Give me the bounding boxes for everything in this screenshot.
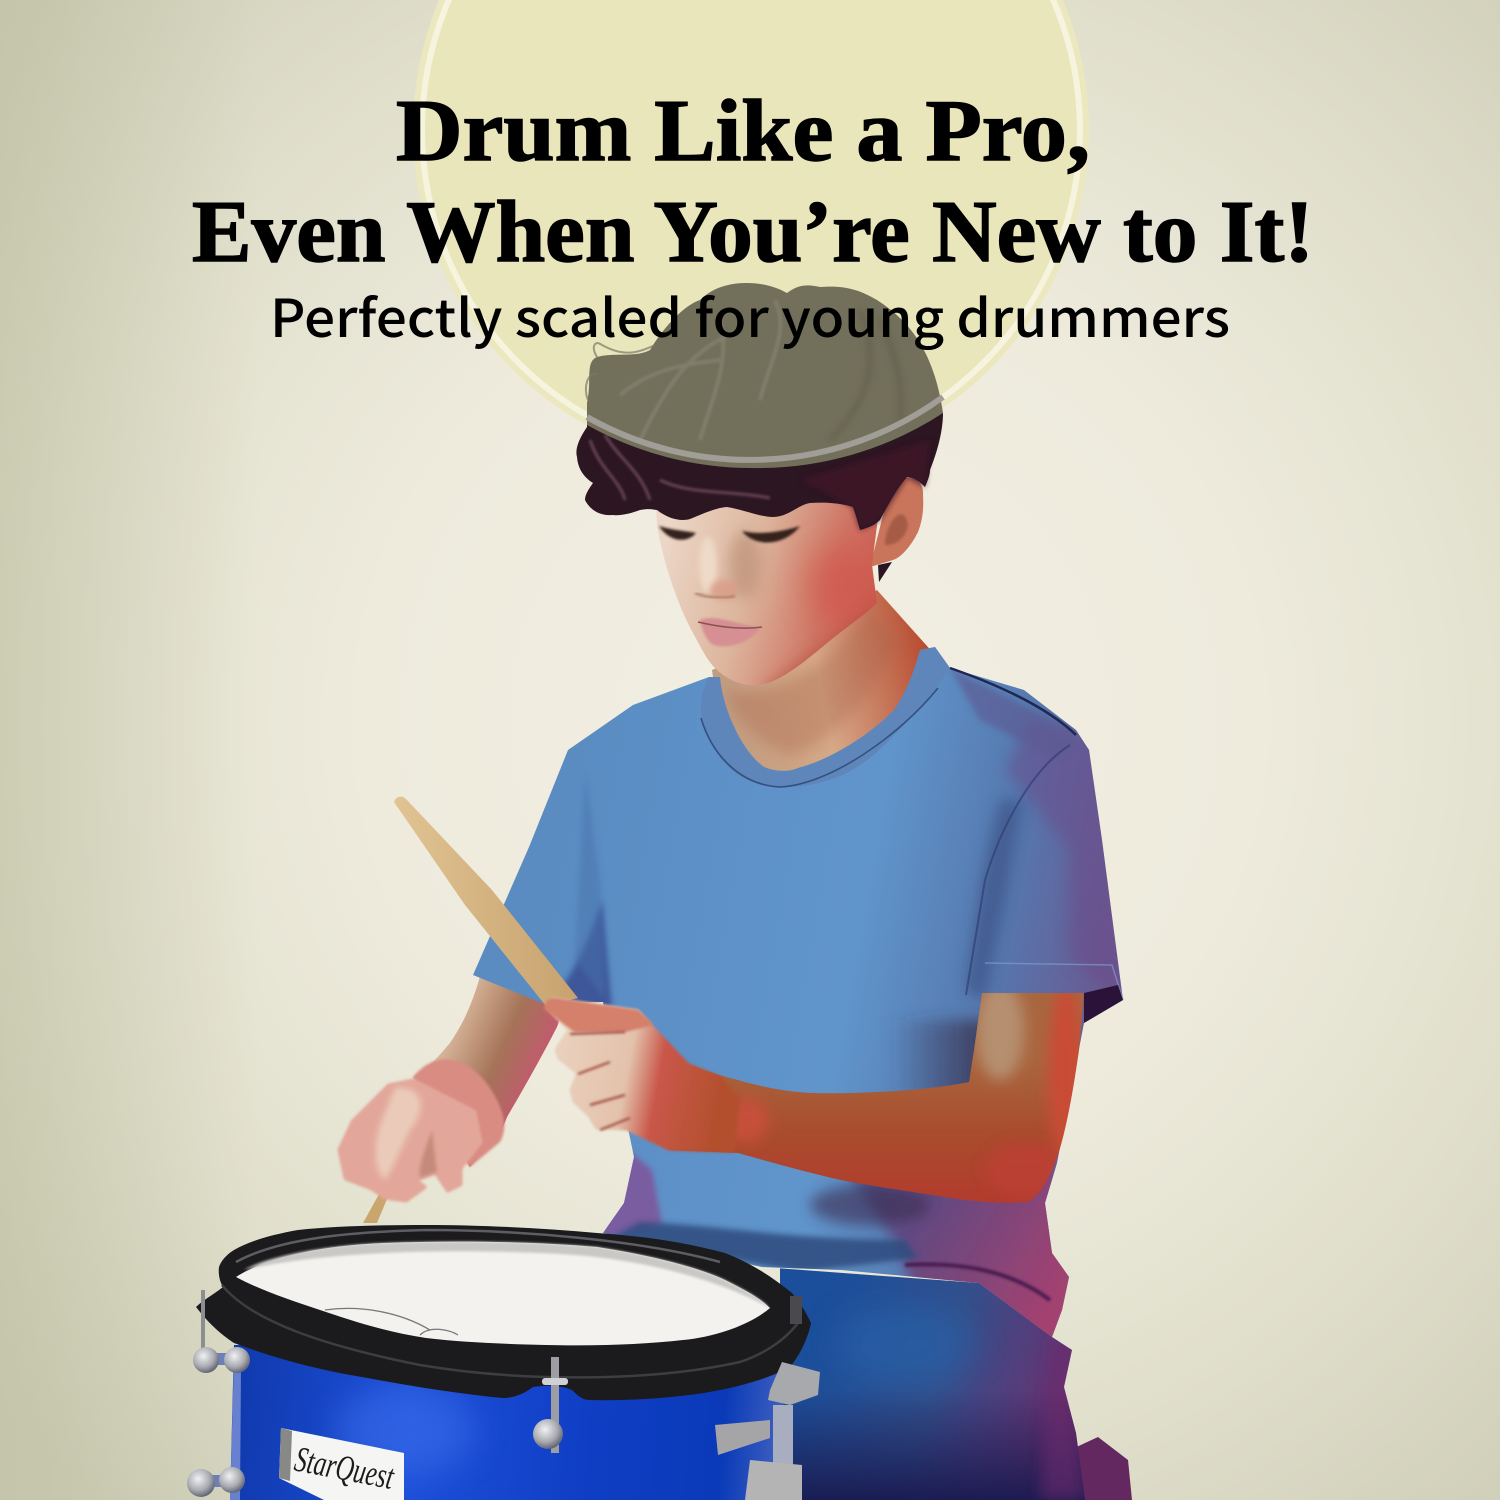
neck xyxy=(712,590,935,790)
title xyxy=(192,83,1314,281)
eyes xyxy=(659,526,800,542)
shell sparkle xyxy=(335,1385,475,1475)
hair through circle xyxy=(586,283,943,468)
right hem xyxy=(985,963,1123,1000)
rim flange xyxy=(196,1225,811,1400)
top stud xyxy=(790,1296,802,1324)
holding hand xyxy=(546,1000,738,1150)
lugs left bottom xyxy=(187,1467,245,1497)
knuckle highlight xyxy=(376,1088,421,1180)
ear xyxy=(870,478,923,567)
sleeve seam right xyxy=(966,745,1070,995)
jaw shadow xyxy=(761,609,870,684)
face base xyxy=(655,470,884,685)
shirt body xyxy=(473,647,1123,1337)
nose shadow xyxy=(729,531,761,599)
face xyxy=(656,502,878,685)
stool xyxy=(1050,1437,1132,1500)
badge edge xyxy=(279,1428,292,1481)
left arm xyxy=(413,965,570,1167)
shirt shading xyxy=(548,668,1125,1345)
drum head xyxy=(236,1242,770,1345)
striking hand xyxy=(340,1081,480,1200)
post xyxy=(773,1405,793,1465)
title line 1: Drum Like a Pro, xyxy=(396,83,1090,180)
curl highlights xyxy=(590,435,770,500)
knuckle shading xyxy=(570,1032,630,1130)
hair lower dark xyxy=(576,403,943,530)
thumb xyxy=(546,1000,650,1030)
hair wisps xyxy=(586,343,655,400)
plum shadow xyxy=(810,1185,930,1225)
center lug xyxy=(533,1357,568,1453)
lower drumstick xyxy=(363,1187,392,1223)
inner sleeve dark xyxy=(1084,985,1123,1023)
palm shadow xyxy=(420,1130,437,1178)
yellow sun circle xyxy=(413,0,1089,468)
head shadow band xyxy=(244,1242,770,1308)
subtitle: Perfectly scaled for young drummers xyxy=(270,277,1230,352)
badge xyxy=(279,1428,404,1500)
pants xyxy=(780,1268,1085,1500)
right hardware xyxy=(715,1296,820,1500)
hair maroon side xyxy=(800,440,930,530)
cheek glow xyxy=(808,543,876,627)
collar xyxy=(701,647,950,787)
hair below ear xyxy=(878,562,892,582)
bracket xyxy=(715,1420,770,1455)
drum xyxy=(187,1225,820,1500)
nose highlight xyxy=(699,537,717,593)
right arm xyxy=(669,993,1084,1203)
mouth line xyxy=(698,622,762,628)
boy figure xyxy=(340,283,1132,1500)
drumstick upper xyxy=(394,797,578,1006)
nose tip xyxy=(710,580,738,600)
rim highlights xyxy=(222,1285,800,1377)
ring over hair xyxy=(587,397,943,460)
hem folds xyxy=(610,1222,918,1272)
nose xyxy=(695,593,735,598)
drum shell xyxy=(230,1345,790,1500)
shoulder seam xyxy=(950,668,1076,735)
shirt xyxy=(473,647,1125,1345)
lower right purple xyxy=(850,1170,1080,1345)
underarm shadow xyxy=(898,1012,979,1090)
left wrist xyxy=(413,1059,504,1167)
title line 2: Even When You’re New to It! xyxy=(192,184,1314,281)
head logo trace xyxy=(325,1308,458,1335)
shell light strip xyxy=(230,1360,241,1500)
palm and fingers xyxy=(550,1000,738,1150)
neck shadow xyxy=(725,610,900,755)
mouth xyxy=(700,618,760,646)
collar line xyxy=(701,688,938,787)
lower left purple xyxy=(603,1150,664,1235)
wing nut xyxy=(768,1362,820,1405)
lugs left top xyxy=(193,1290,250,1373)
block xyxy=(745,1460,802,1500)
ear inner xyxy=(885,514,908,545)
badge plate xyxy=(279,1428,404,1500)
